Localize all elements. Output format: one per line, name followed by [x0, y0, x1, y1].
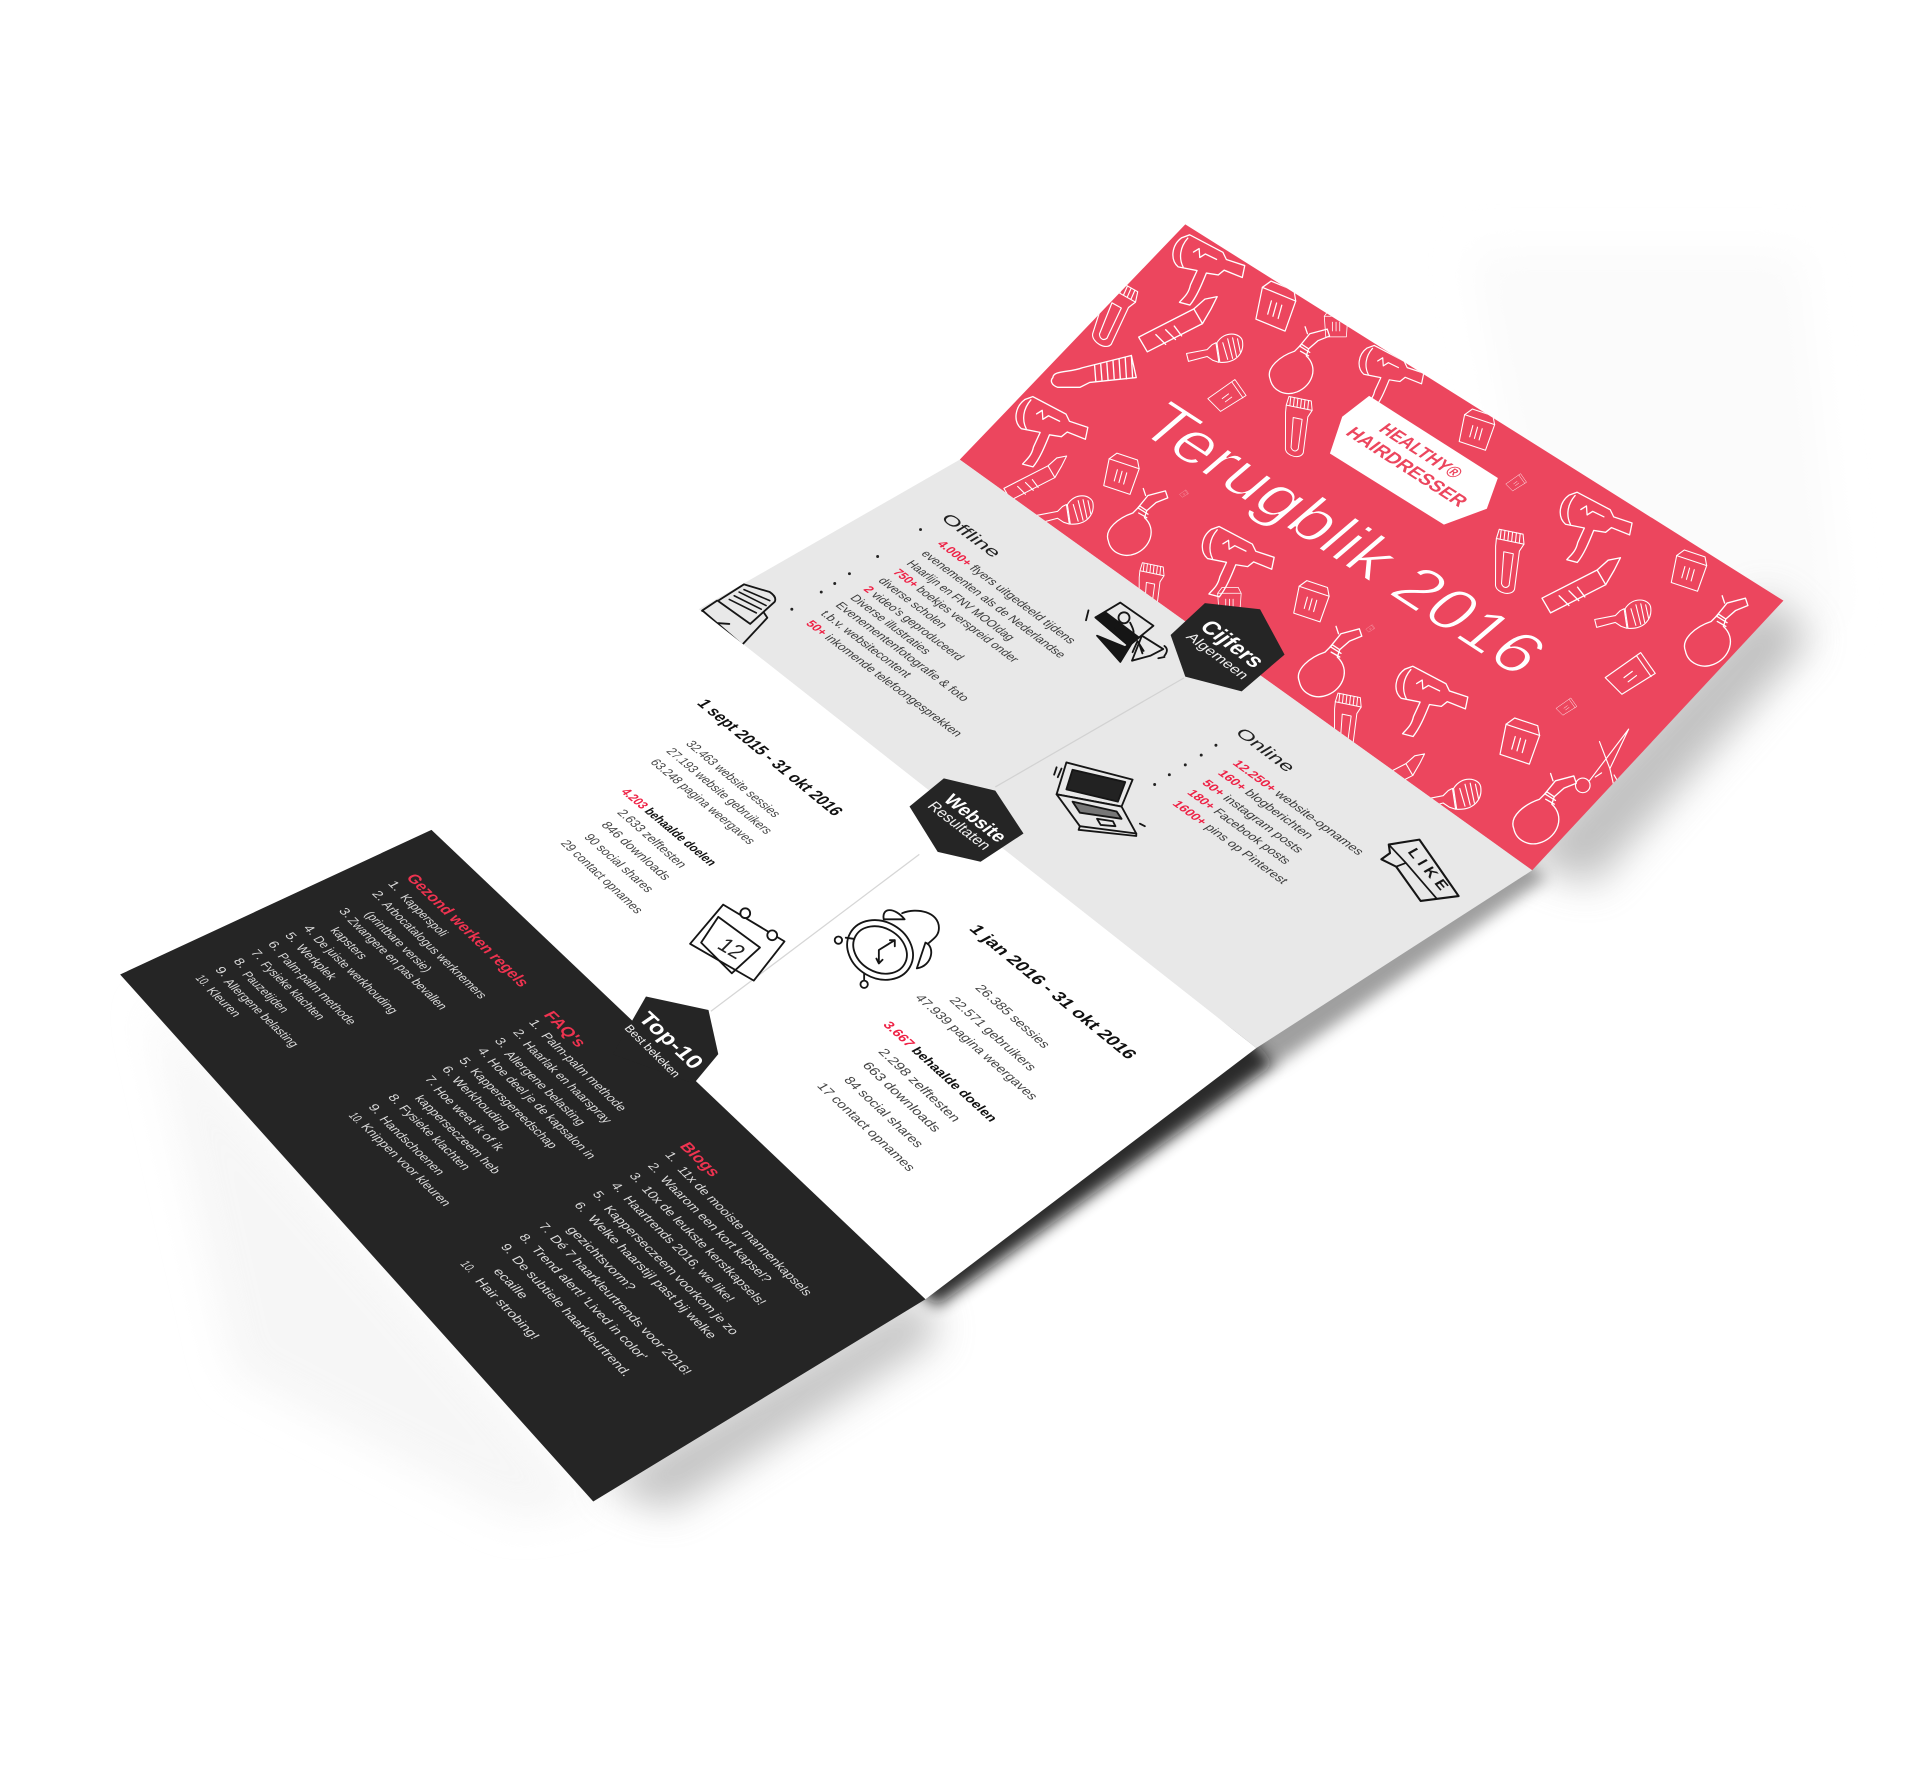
column: blogs: 1.	[662, 1149, 683, 1164]
offline list: 4.000+ flyers uitgedeeld tijdens	[934, 538, 1080, 646]
period one: 2.633 zelftesten	[614, 807, 690, 870]
period one: 27.193 website gebruikers	[663, 746, 776, 836]
column: blogs: Waarom een kort kapsel?	[657, 1174, 775, 1284]
column: gezond werken regels: Arbocatalogus werknemers	[379, 899, 491, 1001]
column: gezond werken regels: 9.	[212, 964, 233, 979]
column: faq: 4.	[474, 1045, 495, 1060]
offline list: evenementen als de Nederlandse	[918, 548, 1070, 660]
offline list: 50+ inkomende telefoongesprekken	[803, 618, 966, 739]
column: faq: Handschoenen	[376, 1114, 448, 1177]
column: blogs: Hair strobing!	[472, 1276, 543, 1341]
badge: website resultaten: Resultaten	[923, 799, 994, 853]
column: gezond werken regels: Zwangere en pas bevallen	[344, 915, 451, 1011]
column: blogs: Kapperseczeem voorkom je zo	[600, 1203, 742, 1337]
column: faq: 9.	[365, 1102, 386, 1116]
offline list: Haarlijn en FNV MOOIdag	[903, 558, 1019, 643]
period two: 26.385 sessies	[972, 982, 1054, 1050]
panel: white website results	[431, 609, 1256, 1299]
online list: 160+ blogberichten	[1215, 768, 1317, 841]
offline list: t.b.v. websitecontent	[818, 608, 915, 680]
column: gezond werken regels: 10.	[192, 973, 214, 988]
column: gezond werken regels: Kleuren	[203, 985, 245, 1019]
panel: black top-10	[120, 830, 925, 1502]
period two: 22.571 gebruikers	[946, 995, 1040, 1073]
column: faq: Hoe deel je de kapsalon in	[484, 1056, 599, 1161]
column: blogs: 4.	[608, 1180, 629, 1194]
period two: 1 jan 2016 - 31 okt 2016	[965, 922, 1142, 1062]
column: blogs: Dé 7 haarkleurtrends voor 2016!	[547, 1233, 695, 1377]
column: blogs: gezichtsvorm?	[564, 1224, 639, 1293]
infographic: folded flyer mockup	[120, 224, 1823, 1524]
column: blogs	[457, 1140, 816, 1378]
column: blogs: 8.	[516, 1232, 537, 1246]
online list: 50+ instagram posts	[1199, 777, 1307, 855]
column: gezond werken regels: 8.	[230, 956, 251, 970]
period one	[558, 696, 848, 916]
black background	[120, 830, 925, 1502]
period one: 4.203 behaalde doelen	[618, 786, 720, 868]
column: faq: 10.	[345, 1110, 367, 1125]
column: gezond werken regels: Palm-palm methode	[274, 951, 360, 1027]
column: faq: 1.	[526, 1017, 547, 1031]
offline list: 2 video's geproduceerd	[860, 584, 968, 662]
period two: 84 social shares	[841, 1074, 927, 1150]
column: gezond werken regels: De juiste werkhouding	[310, 934, 402, 1016]
period two: 17 contact opnames	[814, 1081, 919, 1173]
online heading: Online	[1231, 725, 1300, 775]
pattern of hairdresser tools	[1004, 232, 1748, 844]
column: faq: Knippen voor kleuren	[358, 1121, 455, 1208]
column: faq: 8.	[385, 1092, 406, 1106]
column: faq: Allergene belasting	[501, 1049, 589, 1127]
period one: 32.463 website sessies	[683, 739, 784, 819]
period one: 1 sept 2015 - 31 okt 2016	[693, 696, 848, 818]
column: gezond werken regels: 2.	[369, 888, 390, 903]
badge: cijfers algemeen	[1171, 603, 1285, 691]
column: faq: Fysieke klachten	[396, 1103, 474, 1172]
badge: cijfers algemeen: Algemeen	[1182, 631, 1252, 682]
column: faq: 5.	[456, 1055, 477, 1069]
like text: LIKE	[1404, 846, 1453, 895]
column: gezond werken regels: Allergene belasting	[220, 977, 302, 1049]
badge: website resultaten	[909, 778, 1023, 862]
icon: calendar	[690, 905, 784, 981]
column: blogs: 11x de mooiste mannenkapsels	[674, 1164, 816, 1298]
offline list: Diverse illustraties	[847, 592, 935, 656]
column: gezond werken regels: kapsters	[327, 925, 371, 962]
column: blogs: 2.	[645, 1161, 666, 1175]
column: faq: 7.	[421, 1073, 443, 1088]
divider	[711, 854, 919, 1011]
icon: envelope	[694, 584, 775, 645]
badge: top-10 best bekeken	[613, 997, 718, 1084]
offline list: diverse scholen	[875, 575, 951, 630]
column: faq: Kappersgereedschap	[467, 1066, 561, 1150]
column: gezond werken regels: (printbare versie)	[361, 909, 435, 974]
column: gezond werken regels: 3.	[336, 906, 357, 920]
gray background	[699, 460, 1532, 1048]
period one: 846 downloads	[598, 819, 674, 882]
column: faq: 2.	[510, 1027, 531, 1041]
online list: 12.250+ website-opnames	[1229, 758, 1368, 857]
column: blogs: Blogs	[676, 1140, 725, 1179]
column: gezond werken regels: Pauzetijden	[239, 969, 293, 1015]
column: faq: Palm-palm methode	[538, 1031, 630, 1113]
column: blogs: 7.	[535, 1221, 557, 1235]
icon: photos	[1086, 603, 1167, 662]
offline list: 750+ boekjes verspreid onder	[890, 567, 1023, 665]
column: faq: 3.	[491, 1035, 513, 1050]
flyer shadows	[147, 251, 1839, 1520]
column: blogs: 3.	[626, 1170, 647, 1185]
column: gezond werken regels: Fysieke klachten	[257, 959, 329, 1022]
column: faq: 6.	[439, 1064, 460, 1078]
column: gezond werken regels: 1.	[385, 879, 406, 893]
calendar number: 12	[712, 933, 751, 963]
column: blogs: ecaille	[490, 1266, 532, 1301]
column: faq	[345, 1008, 630, 1208]
column: faq: kapperseczeem heb	[412, 1093, 504, 1176]
column: faq: Haarlak en haarspray	[520, 1039, 616, 1125]
column: gezond werken regels	[192, 871, 534, 1049]
column: gezond werken regels: 5.	[282, 930, 303, 944]
panel: gray cijfers	[694, 460, 1532, 1048]
column: blogs: 5.	[589, 1189, 610, 1203]
online list	[1153, 744, 1368, 886]
badge: cijfers algemeen: Cijfers	[1195, 616, 1271, 672]
cover background	[960, 224, 1783, 870]
white background	[431, 609, 1256, 1299]
period one: 90 social shares	[581, 832, 657, 895]
column: gezond werken regels: Werkplek	[293, 942, 341, 982]
offline heading: Offline	[937, 511, 1006, 560]
column: faq: Hoe weet ik of ik	[430, 1085, 508, 1153]
period two: 2.298 zelftesten	[875, 1046, 964, 1124]
icon: alarm clock	[835, 908, 939, 992]
title: Terugblik 2016	[1124, 391, 1562, 687]
panel: red cover	[960, 224, 1783, 870]
online list: 1600+ pins op Pinterest	[1169, 798, 1292, 886]
period two: 663 downloads	[859, 1060, 945, 1134]
offline list	[790, 528, 1080, 739]
column: faq: Werkhouding	[448, 1075, 515, 1132]
logo hexagon	[1330, 396, 1498, 525]
period two	[814, 922, 1142, 1173]
icon: laptop	[1054, 762, 1145, 836]
column: gezond werken regels: 7.	[247, 947, 269, 961]
badge: top-10 best bekeken: Top-10	[633, 1007, 709, 1073]
column: blogs: Trend alert! 'Lived in color'	[528, 1244, 651, 1362]
online list: 180+ Facebook posts	[1184, 787, 1295, 866]
period one: 29 contact opnames	[558, 838, 647, 916]
column: gezond werken regels: Kapperspoli	[397, 892, 452, 938]
period two: 3.667 behaalde doelen	[880, 1019, 1001, 1124]
column: blogs: 10x de leukste kerstkapsels!	[638, 1184, 770, 1307]
badge: top-10 best bekeken: Best bekeken	[621, 1022, 683, 1080]
offline list: Evenementenfotografie & foto	[832, 600, 973, 703]
column: gezond werken regels: Gezond werken regels	[402, 871, 534, 989]
column: blogs: 9.	[497, 1241, 519, 1256]
column: faq: FAQ's	[540, 1008, 591, 1050]
logo text: HAIRDRESSER	[1341, 424, 1472, 511]
logo text: HEALTHY®	[1374, 421, 1467, 482]
period one: 63.248 pagina weergaves	[647, 757, 759, 846]
column: gezond werken regels: 4.	[300, 923, 321, 937]
column: blogs: 10.	[457, 1259, 480, 1274]
badge: website resultaten: Website	[939, 791, 1011, 846]
column: blogs: Welke haarstijl past bij welke	[585, 1213, 720, 1341]
column: blogs: Haartrends 2016, we like!	[620, 1194, 738, 1304]
icon: like speech bubble	[1381, 840, 1459, 901]
column: blogs: De subtiele haarkleurtrend.	[509, 1254, 635, 1378]
column: gezond werken regels: 6.	[265, 939, 286, 953]
divider	[995, 678, 1184, 787]
column: blogs: 6.	[571, 1200, 592, 1214]
period two: 47.939 pagina weergaves	[912, 992, 1041, 1102]
